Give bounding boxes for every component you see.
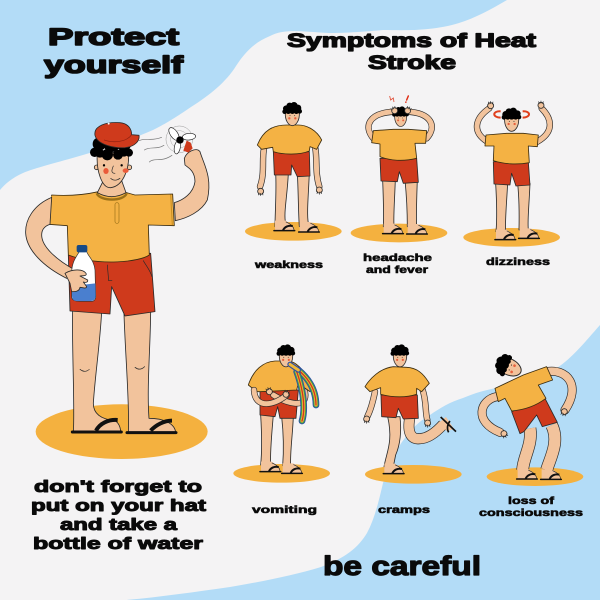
title: protect yourself: Protect (48, 24, 179, 51)
legs (72, 310, 176, 433)
shorts (381, 395, 418, 419)
ground ellipse (365, 465, 462, 484)
be careful: be careful (323, 551, 481, 581)
shirt (257, 125, 322, 154)
symptom labels: consciousness (479, 507, 583, 519)
fan (166, 126, 196, 154)
arms (477, 101, 550, 142)
bent leg (409, 417, 456, 439)
advice text: don't forget to (34, 478, 202, 496)
symptom labels: dizziness (486, 256, 550, 268)
arms (258, 148, 322, 196)
advice text: bottle of water (33, 535, 204, 553)
symptom labels: and fever (366, 264, 428, 276)
title: symptoms of heat stroke: Symptoms of Heat (287, 30, 537, 52)
figure: headache and fever (351, 96, 447, 242)
legs (260, 415, 302, 473)
shorts (493, 162, 530, 186)
ground ellipse (487, 467, 583, 486)
shirt (372, 129, 427, 160)
head (491, 351, 525, 383)
figure: cramps (364, 344, 462, 484)
symptom labels: cramps (378, 504, 430, 516)
neck and head (94, 152, 132, 197)
symptom labels: weakness (254, 259, 323, 271)
legs (517, 425, 561, 479)
ground ellipse (36, 404, 208, 459)
shorts (380, 158, 418, 183)
dizzy arrows (494, 111, 529, 118)
water bottle (72, 245, 96, 301)
symptom labels: loss of (508, 495, 555, 507)
legs (274, 173, 319, 232)
title: protect yourself: yourself (44, 52, 184, 79)
pain marks (390, 96, 394, 102)
shorts (68, 253, 155, 316)
advice text (31, 478, 207, 553)
legs (495, 183, 539, 240)
hand on bottle (65, 270, 88, 292)
symptom labels: vomiting (252, 504, 317, 516)
head (392, 106, 409, 127)
shirt (495, 367, 553, 411)
symptom labels (252, 252, 583, 519)
sandals (72, 420, 176, 433)
ground ellipse (463, 228, 560, 247)
advice text: put on your hat (31, 497, 207, 515)
head (502, 108, 521, 131)
shorts (260, 390, 298, 418)
arms (369, 112, 432, 138)
red cap (95, 123, 139, 148)
shirt (48, 192, 174, 262)
figure: weakness (245, 102, 342, 241)
left arm (26, 197, 75, 278)
head (390, 344, 409, 367)
advice text: and take a (60, 516, 178, 534)
symptom labels: headache (363, 252, 432, 264)
shirt (248, 361, 312, 392)
head (276, 344, 295, 367)
standing leg (383, 417, 404, 474)
ground ellipse (233, 464, 330, 483)
figure: vomiting (233, 344, 330, 483)
shorts (273, 152, 310, 177)
ground ellipse (245, 222, 342, 241)
hands on head (390, 105, 399, 115)
wind lines (139, 137, 172, 162)
hair (90, 135, 133, 160)
ground ellipse (351, 224, 447, 242)
main figure with hat, fan and water bottle (26, 123, 209, 459)
head (282, 102, 302, 126)
legs (383, 180, 427, 234)
arms (482, 371, 572, 439)
shirt (365, 367, 429, 397)
figure: loss of consciousness (482, 351, 583, 486)
rainbow vomit (290, 364, 316, 421)
figure: dizziness (463, 101, 560, 247)
raised arm (174, 150, 209, 221)
arms (364, 390, 431, 427)
shorts (512, 398, 557, 434)
title: symptoms of heat stroke: Stroke (368, 52, 456, 74)
title: protect yourself (44, 24, 184, 79)
title: symptoms of heat stroke (287, 30, 537, 74)
shirt (485, 133, 538, 164)
crossed arms (254, 387, 305, 404)
